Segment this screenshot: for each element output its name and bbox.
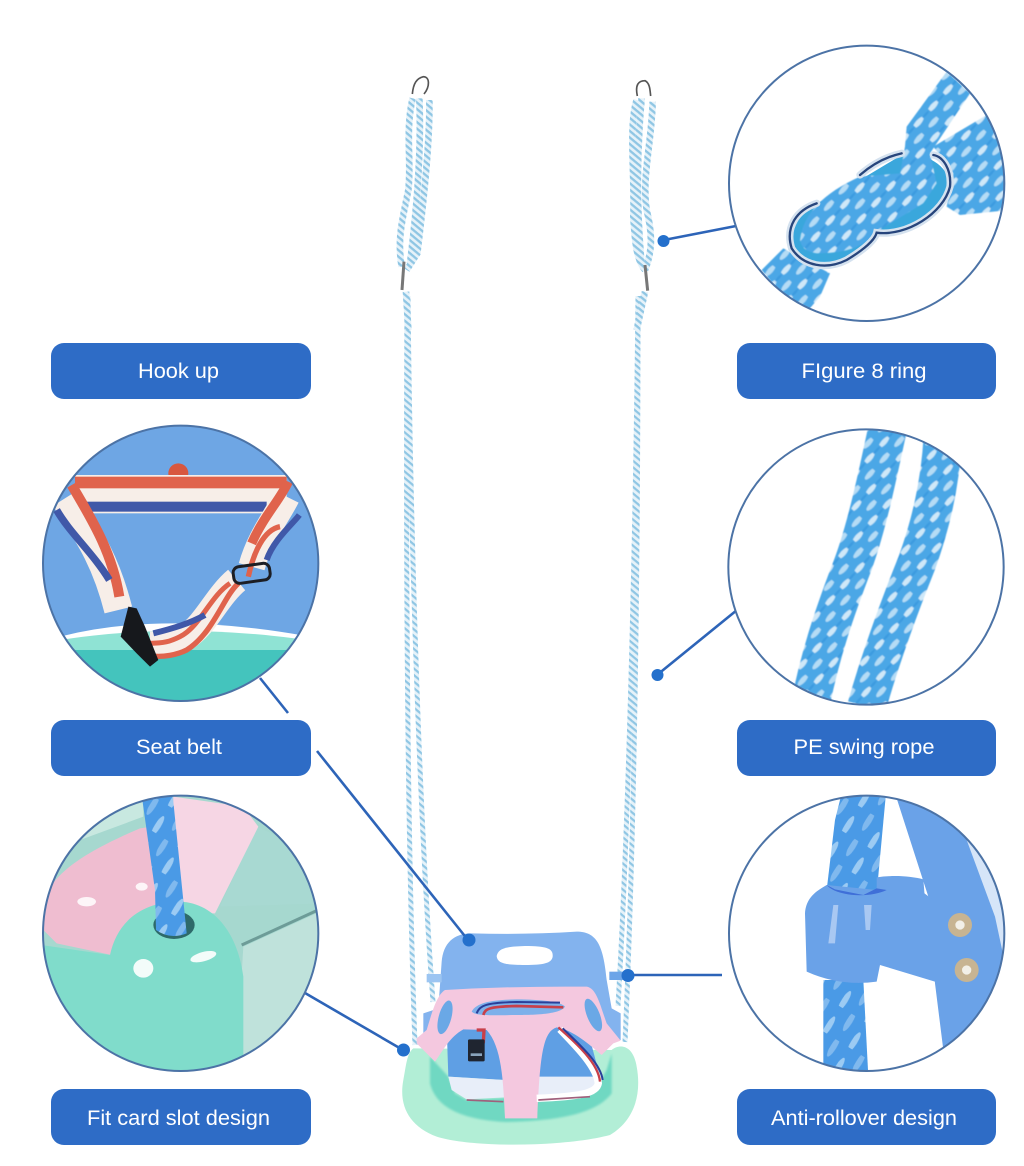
teal dome: [44, 902, 244, 1070]
top band: [75, 475, 287, 513]
blue inner seat: [447, 1027, 504, 1080]
pink front frame: [417, 987, 621, 1118]
left strap: [57, 485, 119, 610]
label: Figure 8 ring: [737, 343, 996, 399]
rope hole: [153, 911, 195, 939]
ring backing: [792, 155, 950, 267]
swing ropes: long cords: [407, 296, 638, 1045]
connector line: fit card slot: [305, 993, 410, 1056]
two twisted ropes: [810, 427, 943, 707]
label: Hook up: [51, 343, 311, 399]
label: Seat belt: [51, 720, 311, 776]
blue backrest: [423, 932, 624, 1040]
screws: [948, 913, 979, 982]
inner belt and buckle: [467, 1027, 603, 1102]
circle: anti-rollover design detail: [729, 793, 1013, 1077]
pink shell: [170, 797, 258, 913]
buckle: [121, 607, 158, 667]
blue strut: [897, 800, 1002, 1047]
label: PE swing rope: PE swing rope: [794, 736, 934, 759]
red knob: [168, 463, 188, 475]
label: Hook up: Hook up: [138, 360, 219, 383]
rope bottom: [823, 980, 868, 1077]
label: Anti-rollover design: Anti-rollover design: [771, 1107, 957, 1130]
label: Fit card slot design: Fit card slot design: [87, 1107, 270, 1130]
right strap: [248, 482, 299, 577]
rope strands: [762, 72, 1010, 310]
teal base: [402, 1047, 638, 1145]
label: Seat belt: Seat belt: [136, 736, 222, 759]
connector line: figure 8 ring: [658, 226, 736, 247]
label: Fit card slot design: [51, 1089, 311, 1145]
background slot: [242, 914, 318, 1054]
swing seat: [402, 932, 638, 1145]
metal ring: [790, 153, 950, 266]
label: Figure 8 ring: FIgure 8 ring: [802, 360, 926, 383]
rope top: [827, 793, 886, 893]
connector line: seat belt: [260, 678, 476, 946]
slider: [232, 563, 271, 584]
lower strap: [150, 580, 238, 656]
circle: figure 8 ring detail: [729, 46, 1010, 321]
connector line: anti-rollover: [622, 969, 722, 982]
circle: seat belt detail: [37, 426, 323, 713]
circle: fit card slot detail: [30, 795, 323, 1083]
connector line: PE swing rope: [652, 610, 737, 681]
clamp arm and cup: [876, 876, 924, 894]
label: PE swing rope: [737, 720, 996, 776]
blue rope: [142, 795, 187, 936]
seat edge: [64, 623, 298, 639]
hanging loops and hooks: [400, 77, 653, 330]
label: Anti-rollover design: [737, 1089, 996, 1145]
circle: PE swing rope detail: [728, 427, 1004, 707]
